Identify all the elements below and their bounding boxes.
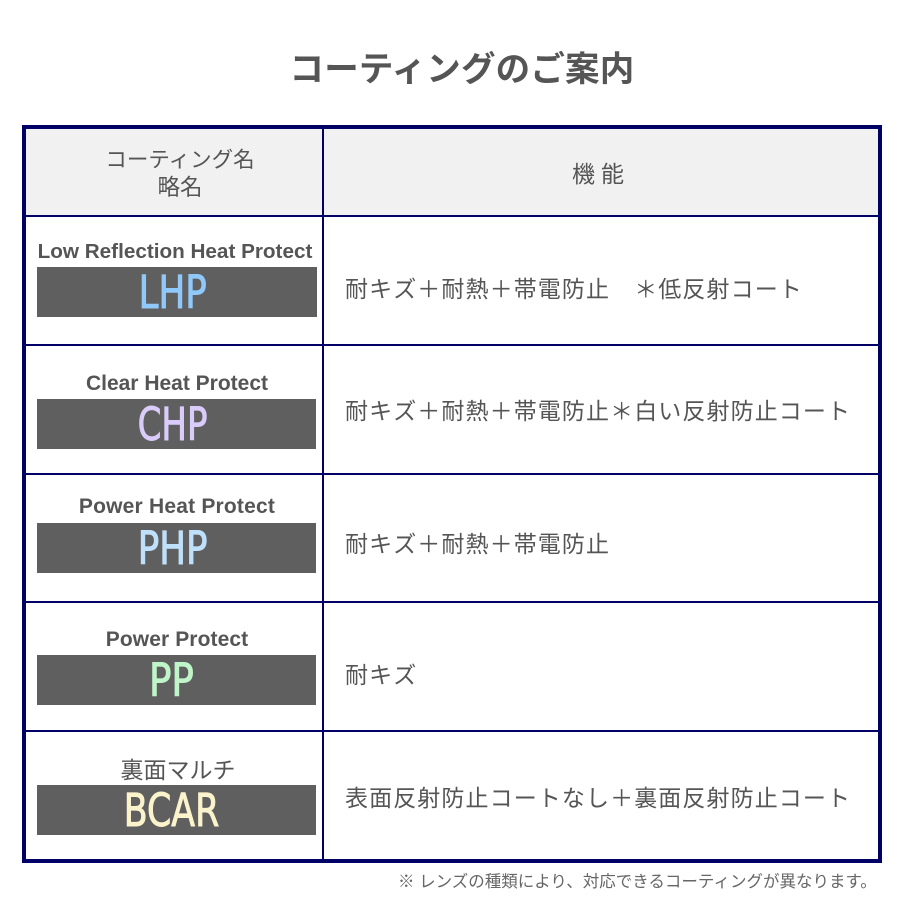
row 3 description: 耐キズ＋耐熱＋帯電防止 [345,531,610,557]
row 3 name: Power Heat Protect [79,495,275,518]
row 2 name: Clear Heat Protect [86,372,268,395]
row 1 badge: LHP [139,266,207,319]
row 1 description: 耐キズ＋耐熱＋帯電防止 ＊低反射コート [345,276,803,302]
row 5 description: 表面反射防止コートなし＋裏面反射防止コート [345,785,851,811]
row 2 badge: CHP [138,398,207,451]
row 5 badge: BCAR [124,784,219,837]
table [22,125,882,863]
header: coating name: 略名 [157,175,202,200]
row 2 badge [37,399,316,449]
header: function: 機能 [572,161,630,187]
table header background [26,129,878,215]
header: coating name: コーティング名 [105,148,255,172]
row 4 name: Power Protect [106,628,248,651]
row 3 badge: PHP [138,522,207,575]
row 2 description: 耐キズ＋耐熱＋帯電防止＊白い反射防止コート [345,398,851,424]
row 3 badge [37,523,316,573]
row 5 name: 裏面マルチ [120,757,236,783]
header: coating name [105,148,255,200]
row 4 badge: PP [149,654,194,707]
row 4 badge [37,655,316,705]
row 5 badge [37,785,316,835]
row 4 description: 耐キズ [345,662,417,688]
row 1 name: Low Reflection Heat Protect [38,240,312,263]
footnote: ※ レンズの種類により、対応できるコーティングが異なります。 [398,873,877,891]
row 1 badge [37,267,317,317]
title: コーティングのご案内 [290,51,634,89]
